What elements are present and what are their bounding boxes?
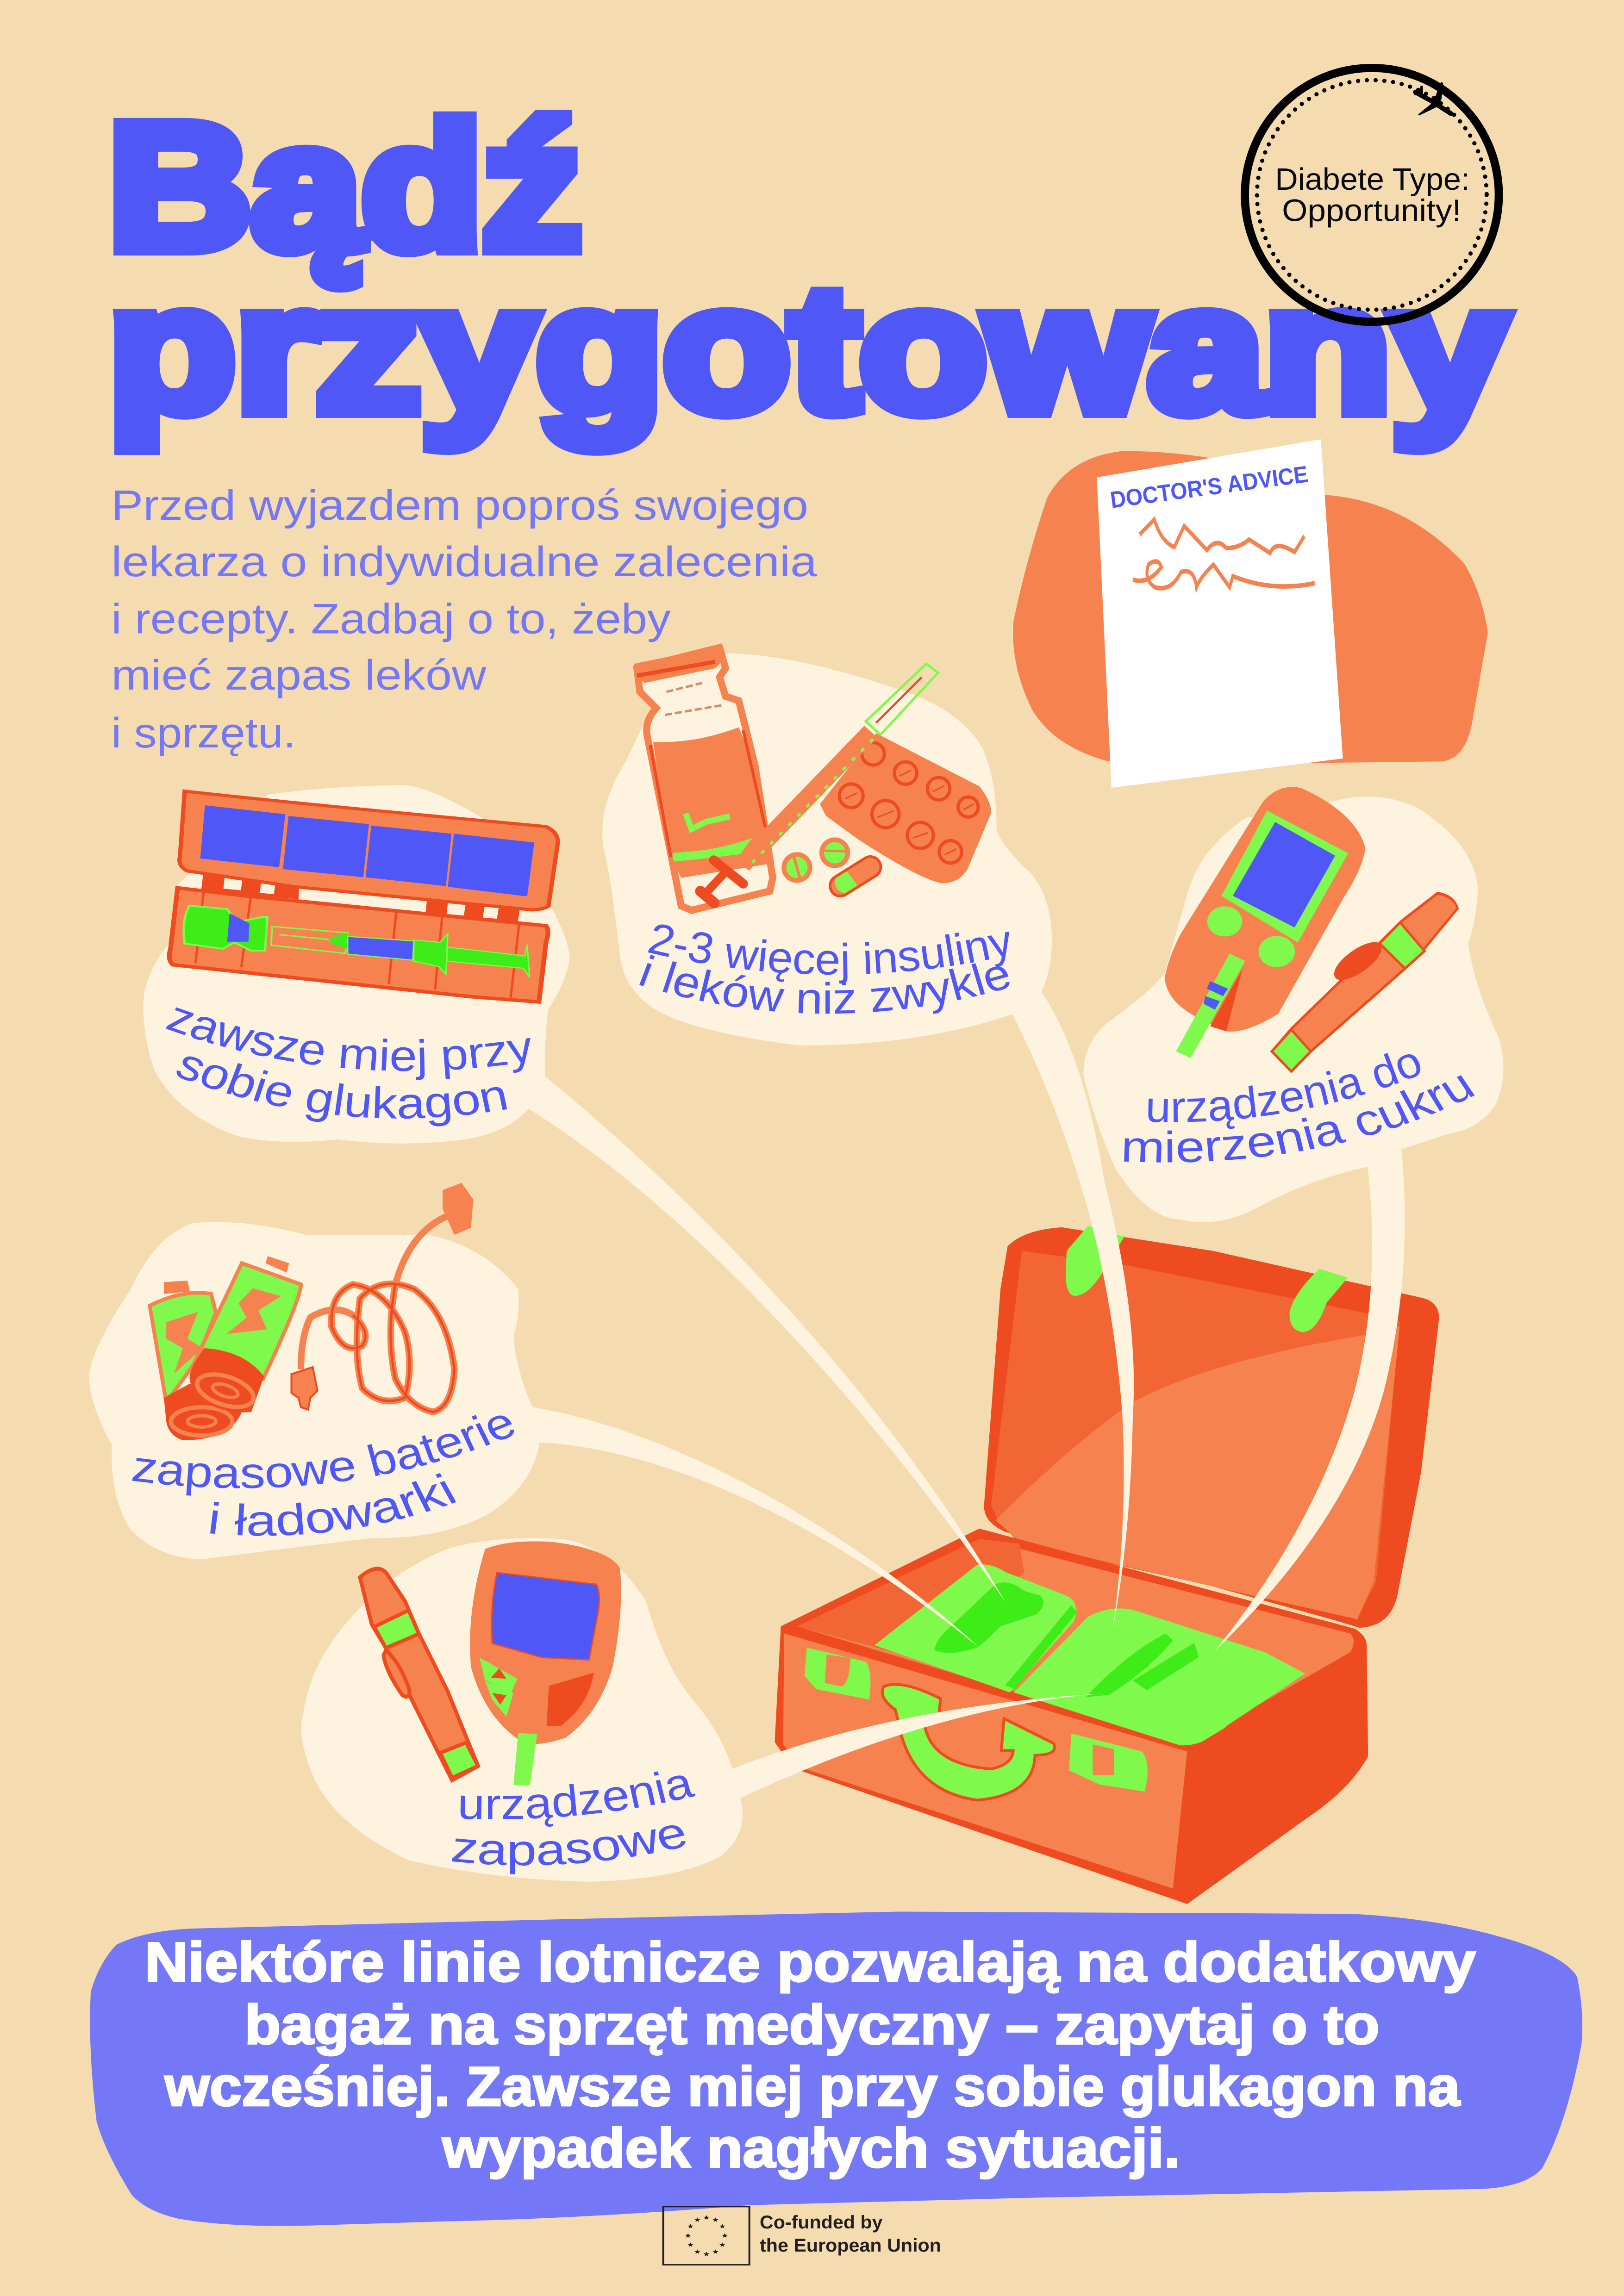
label: urządzenia (457, 1758, 699, 1829)
label (633, 913, 1017, 1023)
icon: glucagon kit (169, 791, 558, 1002)
EU text: Co-funded by (760, 2212, 883, 2233)
icon: insulin vial, syringe and pills (634, 646, 991, 910)
panel: airline callout (90, 1911, 1582, 2226)
callout text: Niektóre linie lotnicze pozwalają na dodatkowy (145, 1931, 1476, 1993)
intro text: Przed wyjazdem poproś swojego (111, 482, 808, 529)
icon: glucose meter (1165, 787, 1458, 1071)
EU co-funding logo (663, 2207, 941, 2265)
panel: glucose meters (1083, 787, 1503, 1222)
intro text: i sprzętu. (111, 709, 296, 757)
EU text: the European Union (760, 2235, 941, 2256)
clothes left (874, 1564, 1076, 1692)
background blob (90, 1911, 1582, 2226)
label: zapasowe baterie (129, 1397, 524, 1498)
label: zawsze miej przy (160, 991, 537, 1081)
label (449, 1758, 699, 1875)
stamp: Diabete Type Opportunity (1245, 68, 1499, 322)
label: sobie glukagon (169, 1039, 512, 1128)
suitcase (775, 1226, 1439, 1904)
syringe (700, 664, 938, 903)
stamp text (1275, 162, 1470, 228)
label: mierzenia cukru (1120, 1059, 1483, 1172)
title (108, 87, 1508, 450)
panel: glucagon (144, 785, 570, 1144)
vial (634, 646, 774, 910)
panel: insulin and medicine (602, 646, 1052, 1045)
intro text: i recepty. Zadbaj o to, żeby (111, 595, 671, 642)
suitcase base interior (775, 1529, 1368, 1904)
panel: doctor's advice (1013, 439, 1488, 788)
label: i leków niż zwykle (633, 947, 1017, 1023)
intro text: lekarza o indywidualne zalecenia (111, 538, 818, 585)
icon: plane (1413, 82, 1451, 116)
callout text (145, 1931, 1476, 2179)
icon: batteries (150, 1256, 301, 1440)
title: Bądź (108, 87, 581, 287)
paper sheet (1097, 439, 1343, 788)
EU flag (663, 2207, 750, 2265)
callout pointers (528, 991, 1405, 1798)
handwriting scribble (1133, 519, 1315, 588)
bubble (602, 653, 1052, 1045)
label: i ładowarki (206, 1465, 464, 1545)
bubble (144, 785, 570, 1144)
bubble (89, 1222, 539, 1559)
callout text: bagaż na sprzęt medyczny – zapytaj o to (244, 1994, 1380, 2056)
suitcase front (783, 1633, 1368, 1904)
handle (884, 1686, 1053, 1798)
panel: batteries and chargers (89, 1183, 539, 1559)
loose pills (781, 837, 885, 900)
label (160, 991, 537, 1128)
panel: spare devices (301, 1538, 743, 1882)
orange blob (1013, 451, 1488, 763)
bubble (301, 1538, 743, 1882)
callout text: wypadek nagłych sytuacji. (442, 2117, 1181, 2179)
stamp text: Opportunity! (1282, 194, 1461, 228)
label: urządzenia do (1145, 1036, 1429, 1132)
EU text (760, 2212, 941, 2256)
callout text: wcześniej. Zawsze miej przy sobie glukagon na (164, 2056, 1461, 2118)
label: zapasowe (449, 1807, 693, 1875)
suitcase lid (984, 1226, 1439, 1628)
intro text: mieć zapas leków (111, 652, 487, 699)
blister pack (820, 733, 991, 883)
intro text (111, 482, 818, 757)
title: przygotowany (108, 249, 1508, 450)
paper heading: DOCTOR'S ADVICE (1109, 460, 1310, 513)
label: 2-3 więcej insuliny (643, 913, 1017, 984)
clothes right (1014, 1608, 1305, 1745)
icon: charger cable (292, 1183, 473, 1412)
lancing device (1272, 893, 1458, 1071)
bubble (1083, 796, 1503, 1222)
label (129, 1397, 524, 1545)
left buckle (805, 1648, 870, 1699)
right buckle (1069, 1734, 1148, 1792)
icon: spare devices (360, 1541, 621, 1785)
stamp text: Diabete Type: (1275, 162, 1470, 197)
